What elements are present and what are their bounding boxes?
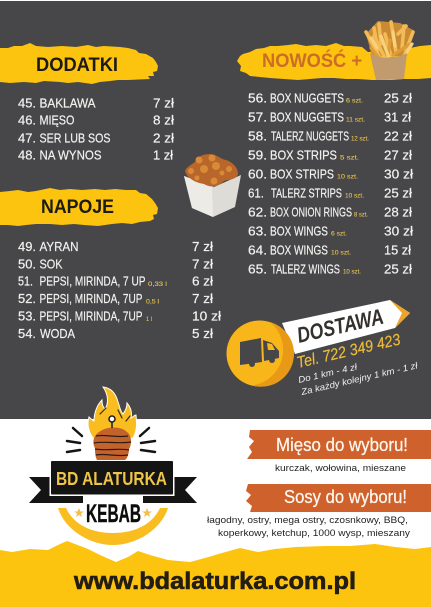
list: nowosc items: 61. (248, 186, 264, 200)
list: nowosc items: 6 szt. (346, 98, 363, 104)
list: nowosc items: TALERZ STRIPS (271, 186, 342, 200)
ribbon tails (29, 477, 197, 503)
list: napoje items: 51. (18, 274, 33, 288)
heading banner: nowosc (237, 43, 431, 80)
icon: fries (366, 21, 413, 80)
heading banner: dodatki (0, 43, 158, 84)
list: nowosc items: BOX STRIPS (270, 148, 337, 162)
list: nowosc items: 31 zł (384, 110, 411, 124)
list: napoje items: PEPSI, MIRINDA, 7UP (40, 310, 142, 324)
heading banner: dodatki: DODATKI (36, 54, 118, 76)
rays (67, 428, 155, 452)
list: napoje items: 0,5 l (146, 300, 159, 306)
delivery prices: Za każdy kolejny 1 km - 1 zł (299, 360, 419, 397)
list: napoje items: 7 zł (192, 292, 213, 306)
list: nowosc items (248, 92, 413, 276)
panel: nowosc (237, 21, 431, 276)
list: dodatki items: 47. (18, 132, 36, 146)
list: nowosc items: 27 zł (384, 148, 412, 162)
logo: bd alaturka kebab (29, 387, 197, 545)
list: nowosc items: 58. (248, 130, 267, 144)
list: dodatki items: BAKLAWA (40, 96, 96, 110)
list: nowosc items: 60. (248, 168, 267, 182)
list: nowosc items: 22 zł (384, 130, 412, 144)
arc (58, 508, 168, 545)
heading banner: napoje: NAPOJE (41, 196, 114, 218)
list: nowosc items: 6 szt. (331, 232, 347, 238)
panel: dostawa delivery (226, 300, 419, 397)
list: napoje items: 52. (18, 292, 36, 306)
list: nowosc items: 15 zł (384, 244, 411, 258)
text: sauce options: koperkowy, ketchup, 1000 wysp, mieszany (218, 528, 410, 539)
heading: sosy do wyboru: Sosy do wyboru! (284, 487, 407, 507)
list: nowosc items: 8 szt. (354, 212, 368, 218)
list: nowosc items: 30 zł (384, 224, 413, 238)
list: nowosc items: 25 zł (384, 92, 412, 106)
list: nowosc items: 11 szt. (346, 118, 365, 124)
list: napoje items: 6 zł (192, 274, 213, 288)
list: nowosc items: 65. (248, 262, 267, 276)
list: napoje items: WODA (40, 327, 76, 341)
list: nowosc items: 57. (248, 110, 267, 124)
icon: flame (88, 387, 137, 438)
heading: mieso do wyboru: Mięso do wyboru! (276, 435, 408, 455)
text: sauce options (207, 515, 410, 539)
list: dodatki items: 7 zł (153, 96, 174, 110)
list: nowosc items: 10 szt. (331, 250, 351, 256)
panel: sauce choice (207, 484, 431, 539)
list: dodatki items: 2 zł (153, 132, 174, 146)
delivery prices: Do 1 km - 4 zł (297, 361, 359, 385)
ribbon: brand name: BD ALATURKA (56, 469, 167, 489)
panel: yellow footer with website (0, 541, 431, 607)
list: napoje items: 54. (18, 327, 36, 341)
list: nowosc items: BOX WINGS (270, 244, 328, 258)
list: nowosc items: 10 szt. (345, 194, 364, 200)
list: dodatki items: 45. (18, 96, 36, 110)
website address: www.bdalaturka.com.pl (73, 568, 356, 595)
list: nowosc items: BOX ONION RINGS (270, 206, 352, 220)
banner: sosy (246, 484, 431, 512)
heading banner: napoje (0, 188, 158, 226)
panel: dark menu background (0, 1, 431, 419)
list: napoje items: 50. (18, 258, 36, 272)
panel: dodatki (0, 43, 174, 162)
list: nowosc items: 25 zł (384, 186, 412, 200)
list: nowosc items: 30 zł (384, 168, 413, 182)
banner: mieso (247, 430, 431, 459)
ribbon: brand name (50, 460, 174, 496)
list: nowosc items: TALERZ NUGGETS (271, 130, 349, 144)
list: napoje items: 7 zł (192, 240, 213, 254)
list: nowosc items: 64. (248, 244, 267, 258)
list: napoje items: PEPSI, MIRINDA, 7 UP (40, 274, 146, 288)
stars (74, 508, 152, 517)
list: nowosc items: 63. (248, 224, 267, 238)
list: nowosc items: 10 szt. (337, 174, 358, 180)
list: napoje items (18, 240, 221, 341)
kebab text: KEBAB (86, 500, 141, 528)
list: dodatki items: 8 zł (153, 114, 174, 128)
text: meat options: kurczak, wołowina, mieszane (275, 463, 406, 474)
list: dodatki items (18, 96, 174, 162)
text: sauce options: łagodny, ostry, mega ostry, czosnkowy, BBQ, (207, 515, 408, 526)
heading banner: nowosc: NOWOŚĆ + (262, 50, 362, 72)
icon: kebab meat (93, 416, 131, 460)
list: napoje items: AYRAN (40, 240, 78, 254)
list: nowosc items: TALERZ WINGS (271, 262, 340, 276)
list: napoje items: 0,33 l (148, 282, 167, 288)
list: nowosc items: BOX NUGGETS (270, 110, 344, 124)
list: dodatki items: 46. (18, 114, 36, 128)
list: dodatki items: 48. (18, 148, 36, 162)
list: nowosc items: 28 zł (384, 206, 412, 220)
list: dodatki items: NA WYNOS (40, 148, 102, 162)
list: napoje items: SOK (40, 258, 63, 272)
list: napoje items: PEPSI, MIRINDA, 7UP (40, 292, 142, 306)
list: nowosc items: BOX WINGS (270, 224, 328, 238)
icon: nuggets box (184, 154, 241, 217)
list: napoje items: 1 l (146, 317, 152, 323)
list: napoje items: 53. (18, 310, 36, 324)
list: nowosc items: 5 szt. (340, 156, 359, 162)
list: nowosc items: 59. (248, 148, 267, 162)
list: napoje items: 49. (18, 240, 36, 254)
list: nowosc items: 25 zł (384, 262, 412, 276)
list: nowosc items: BOX STRIPS (270, 168, 334, 182)
list: nowosc items: BOX NUGGETS (270, 92, 344, 106)
list: nowosc items: 62. (248, 206, 267, 220)
icon: delivery truck badge (226, 320, 294, 387)
list: dodatki items: MIĘSO (40, 114, 75, 128)
phone number: Tel. 722 349 423 (295, 331, 402, 372)
list: nowosc items: 10 szt. (343, 270, 361, 276)
list: nowosc items: 56. (248, 92, 267, 106)
panel: napoje (0, 188, 221, 341)
list: napoje items: 10 zł (192, 310, 221, 324)
list: dodatki items: 1 zł (153, 148, 173, 162)
list: napoje items: 7 zł (192, 258, 213, 272)
arrow banner: dostawa: DOSTAWA (295, 304, 386, 348)
list: nowosc items: 12 szt. (351, 136, 369, 142)
panel: meat choice (247, 430, 431, 474)
list: dodatki items: SER LUB SOS (40, 132, 110, 146)
list: napoje items: 5 zł (192, 327, 213, 341)
